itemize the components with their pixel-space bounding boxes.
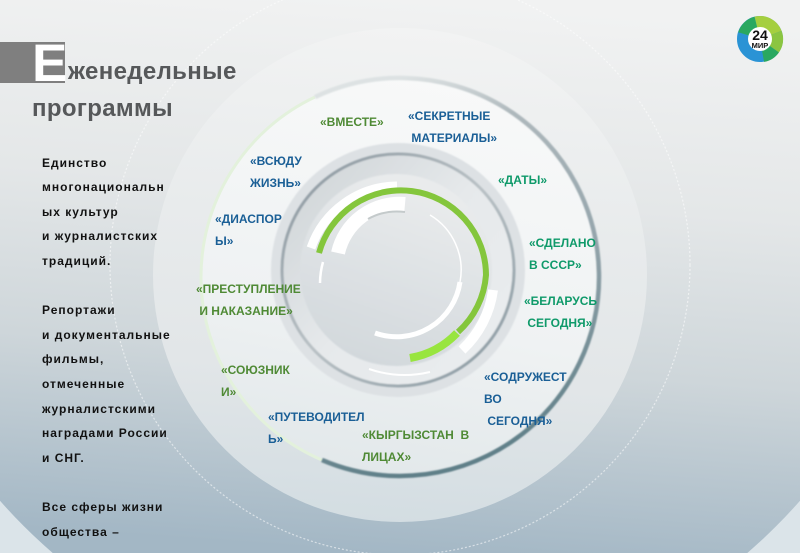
body text: Единство bbox=[42, 156, 107, 170]
program label: Кыргызстан в лицах: ЛИЦАХ» bbox=[362, 450, 411, 464]
program label: Диаспоры: Ы» bbox=[215, 234, 233, 248]
program label: Диаспоры bbox=[215, 212, 282, 248]
program label: Кыргызстан в лицах: «КЫРГЫЗСТАН В bbox=[362, 428, 469, 442]
program label: Преступление и наказание: «ПРЕСТУПЛЕНИЕ bbox=[196, 282, 301, 296]
title: Е bbox=[32, 34, 68, 93]
body text: и СНГ. bbox=[42, 451, 85, 465]
body text: ых культур bbox=[42, 205, 119, 219]
program label: Путеводитель bbox=[268, 410, 365, 446]
body text: общества – bbox=[42, 525, 120, 539]
program label: Всюду жизнь: ЖИЗНЬ» bbox=[250, 176, 301, 190]
program label: Преступление и наказание: И НАКАЗАНИЕ» bbox=[199, 304, 293, 318]
title: программы bbox=[32, 95, 173, 122]
program label: Путеводитель: «ПУТЕВОДИТЕЛ bbox=[268, 410, 365, 424]
body text: журналистскими bbox=[42, 402, 156, 416]
program label: Сделано в СССР bbox=[529, 236, 596, 272]
title bbox=[32, 34, 237, 122]
body text: Все сферы жизни bbox=[42, 500, 163, 514]
program label: Союзники: «СОЮЗНИК bbox=[221, 363, 290, 377]
program label: Содружество сегодня: СЕГОДНЯ» bbox=[487, 414, 552, 428]
body text: наградами России bbox=[42, 426, 168, 440]
program label: Беларусь сегодня: СЕГОДНЯ» bbox=[527, 316, 592, 330]
program label: Союзники bbox=[221, 363, 290, 399]
icon: 24 Mir logo bbox=[737, 16, 784, 62]
program label: Содружество сегодня: ВО bbox=[484, 392, 502, 406]
body text bbox=[42, 156, 171, 539]
program label: Беларусь сегодня: «БЕЛАРУСЬ bbox=[524, 294, 597, 308]
body text: и документальные bbox=[42, 328, 171, 342]
program label: Преступление и наказание bbox=[196, 282, 301, 318]
icon: 24 Mir logo: МИР bbox=[752, 41, 768, 50]
title badge bbox=[0, 42, 65, 83]
body text: многонациональн bbox=[42, 180, 165, 194]
title: женедельные bbox=[68, 58, 237, 85]
program label: Даты: «ДАТЫ» bbox=[498, 173, 547, 187]
program label: Секретные материалы bbox=[408, 109, 497, 145]
program label: Диаспоры: «ДИАСПОР bbox=[215, 212, 282, 226]
program label: Вместе: «ВМЕСТЕ» bbox=[320, 115, 384, 129]
program label: Содружество сегодня bbox=[484, 370, 567, 428]
program label: Всюду жизнь bbox=[250, 154, 302, 190]
program label: Сделано в СССР: «СДЕЛАНО bbox=[529, 236, 596, 250]
icon: 24 Mir logo: 24 bbox=[752, 27, 768, 43]
program label: Всюду жизнь: «ВСЮДУ bbox=[250, 154, 302, 168]
program label: Содружество сегодня: «СОДРУЖЕСТ bbox=[484, 370, 567, 384]
program label: Путеводитель: Ь» bbox=[268, 432, 283, 446]
program label: Сделано в СССР: В СССР» bbox=[529, 258, 582, 272]
body text: и журналистских bbox=[42, 229, 158, 243]
body text: традиций. bbox=[42, 254, 111, 268]
body text: Репортажи bbox=[42, 303, 116, 317]
program label: Секретные материалы: «СЕКРЕТНЫЕ bbox=[408, 109, 490, 123]
program label: Кыргызстан в лицах bbox=[362, 428, 469, 464]
program label: Секретные материалы: МАТЕРИАЛЫ» bbox=[411, 131, 497, 145]
body text: отмеченные bbox=[42, 377, 125, 391]
body text: фильмы, bbox=[42, 352, 104, 366]
program label: Беларусь сегодня bbox=[524, 294, 597, 330]
program label: Союзники: И» bbox=[221, 385, 236, 399]
